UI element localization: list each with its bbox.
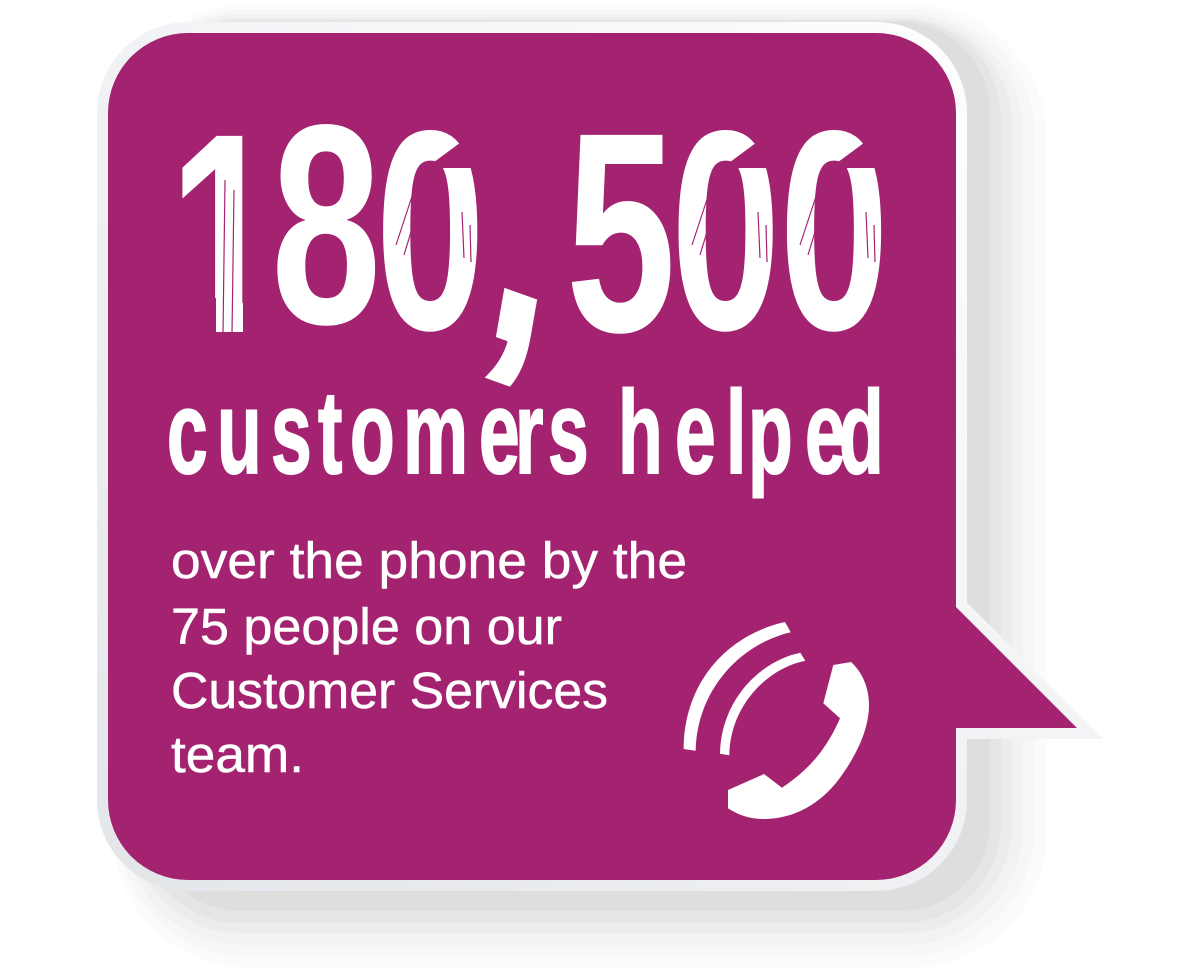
body text [171, 532, 687, 783]
subheading: customers helped [167, 366, 884, 498]
layered drop shadow [113, 4, 1047, 967]
panel: speech bubble [108, 33, 1077, 880]
headline number: 180,500 [169, 66, 889, 406]
brush texture on number [176, 122, 888, 336]
body text: 75 people on our [171, 598, 562, 655]
body text: team. [171, 726, 304, 783]
body text: Customer Services [171, 662, 608, 719]
body text: over the phone by the [171, 532, 687, 589]
icon: ringing telephone [684, 622, 869, 819]
